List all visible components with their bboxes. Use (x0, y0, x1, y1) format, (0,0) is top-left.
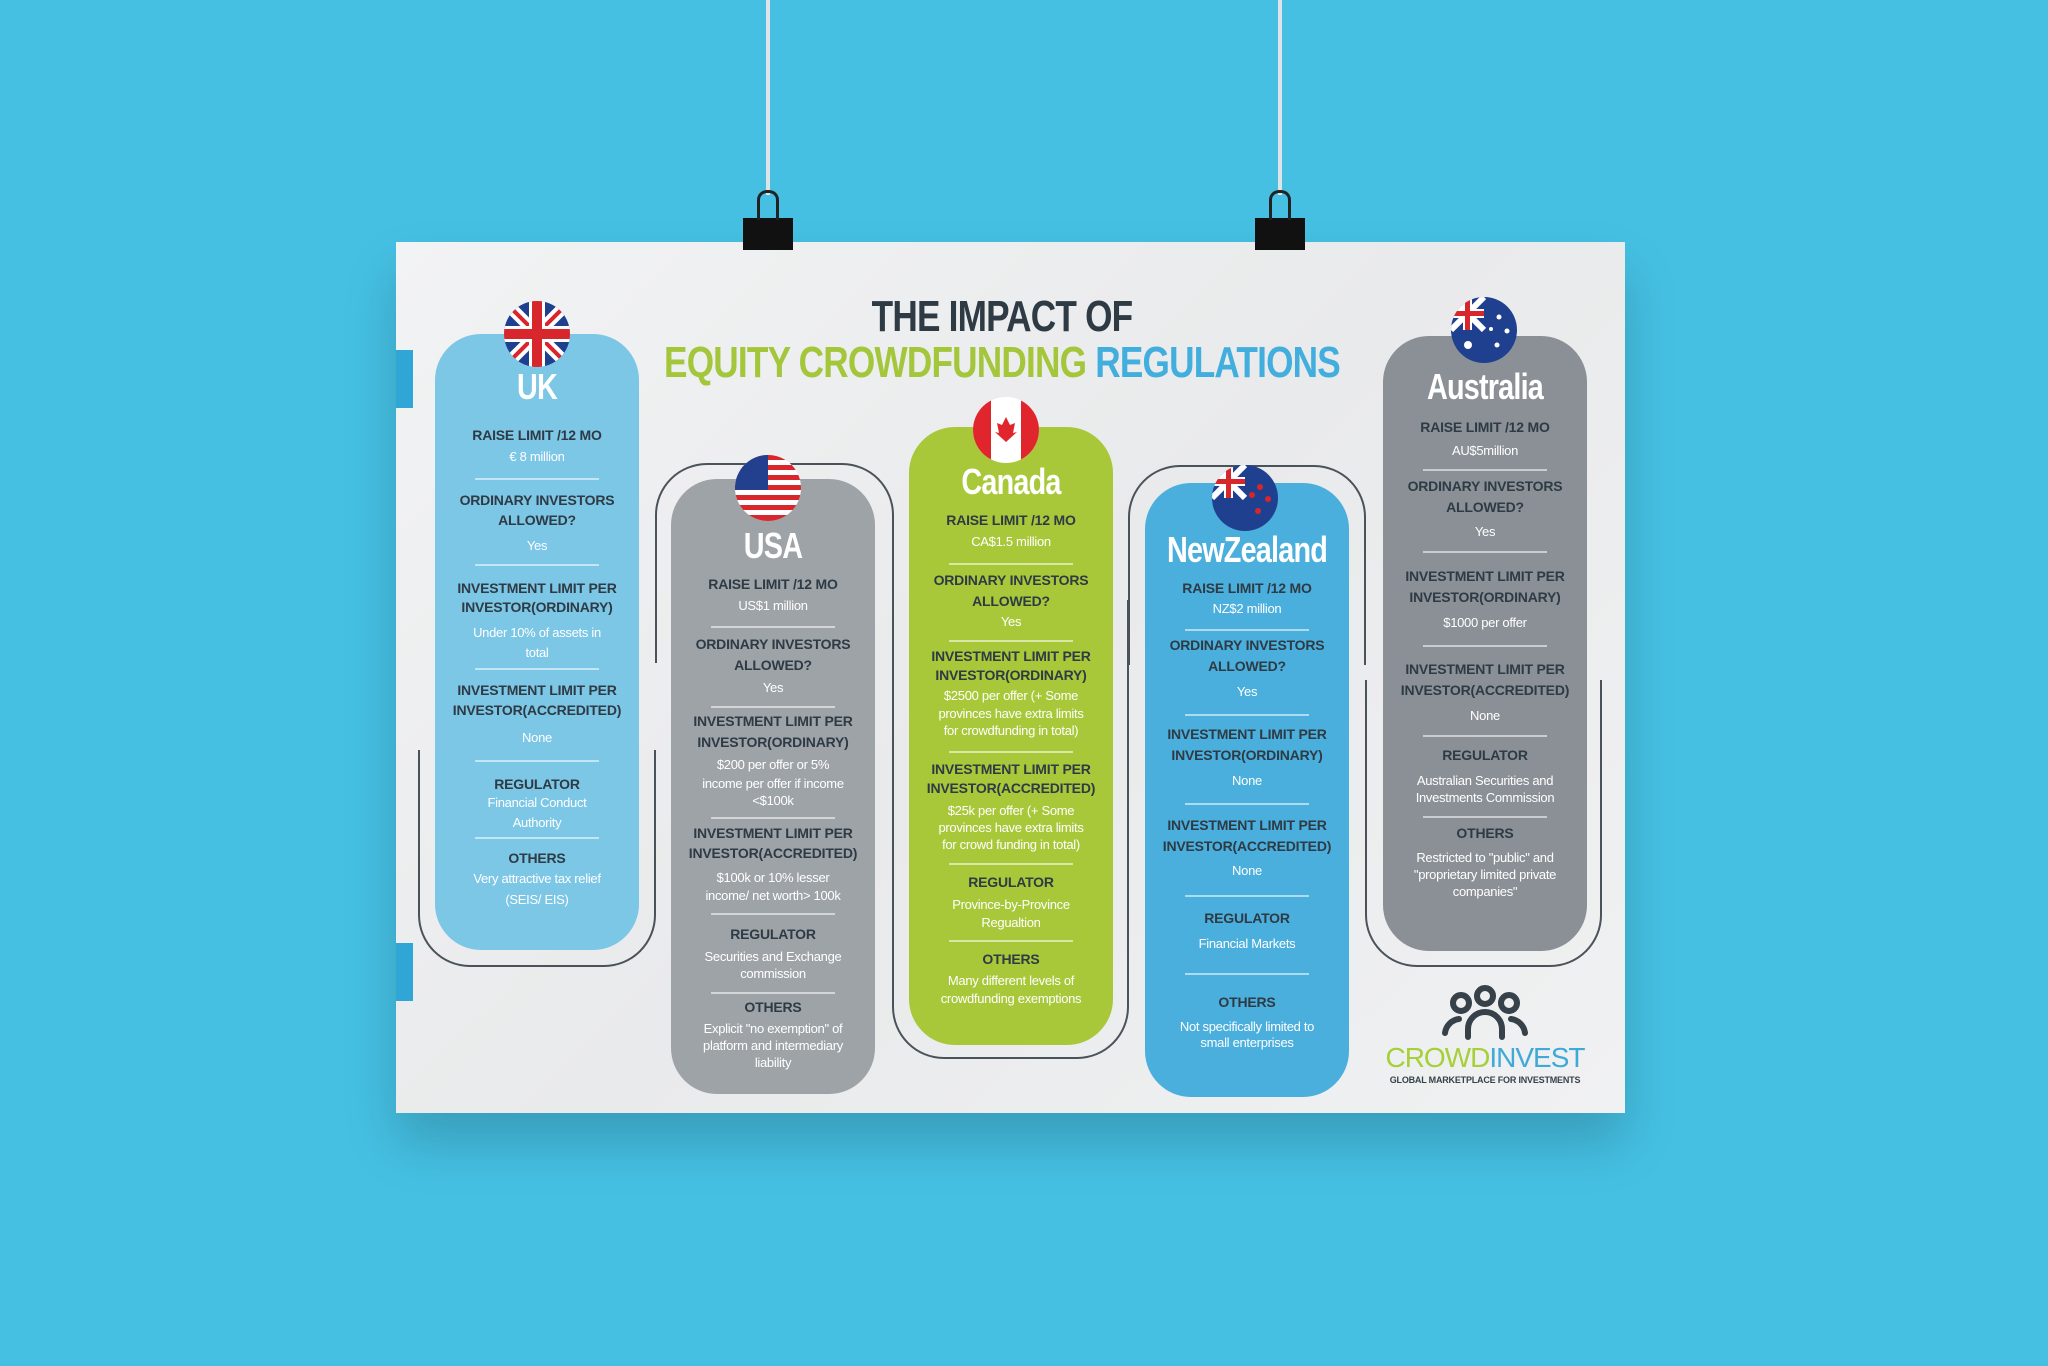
panel: USA: $200 per offer or 5% (717, 757, 829, 772)
panel: Canada: CA$1.5 million (971, 534, 1051, 549)
strings (766, 0, 770, 195)
panel: Canada: INVESTMENT LIMIT PER (931, 761, 1091, 777)
panel: NewZealand: INVESTMENT LIMIT PER (1167, 817, 1327, 833)
title: EQUITY CROWDFUNDING REGULATIONS (664, 338, 1340, 387)
panel: NewZealand: Yes (1237, 684, 1257, 699)
panel: UK: total (525, 645, 549, 660)
panel: Canada: $2500 per offer (+ Some (944, 688, 1078, 703)
panel: UK: INVESTMENT LIMIT PER (457, 580, 617, 596)
panel: USA: Explicit "no exemption" of (704, 1021, 842, 1036)
panel: Australia: AU$5million (1452, 443, 1518, 458)
panel: USA: ALLOWED? (734, 657, 812, 673)
panel: Canada: for crowdfunding in total) (944, 723, 1078, 738)
panel: Australia: OTHERS (1456, 825, 1514, 841)
panel: USA: platform and intermediary (703, 1038, 843, 1053)
panel: UK: ALLOWED? (498, 512, 576, 528)
panel: NewZealand (1145, 483, 1349, 1097)
panel: UK: INVESTMENT LIMIT PER (457, 682, 617, 698)
icon: Canada flag (973, 397, 1039, 463)
panel: NewZealand: None (1232, 773, 1262, 788)
panel: USA: <$100k (752, 793, 794, 808)
panel: Australia: ORDINARY INVESTORS (1408, 478, 1562, 494)
panel: Australia: INVESTMENT LIMIT PER (1405, 568, 1565, 584)
icon: USA flag (735, 455, 801, 521)
panel: Australia: REGULATOR (1442, 747, 1528, 763)
panel: Canada: Many different levels of (948, 973, 1074, 988)
panel: Australia: INVESTOR(ORDINARY) (1409, 589, 1561, 605)
panel: NewZealand: Not specifically limited to (1180, 1019, 1314, 1034)
panel: UK: € 8 million (509, 449, 565, 464)
panel: UK: REGULATOR (494, 776, 580, 792)
panel: USA: liability (755, 1055, 791, 1070)
panel: USA: RAISE LIMIT /12 MO (708, 576, 838, 592)
panel: USA: income/ net worth> 100k (705, 888, 841, 903)
logo: CrowdInvest: GLOBAL MARKETPLACE FOR INVESTMENTS (1390, 1075, 1580, 1085)
panel: Australia: "proprietary limited private (1414, 867, 1556, 882)
panel: Australia: RAISE LIMIT /12 MO (1420, 419, 1550, 435)
panel: Australia: Australian Securities and (1417, 773, 1553, 788)
panel: UK: Very attractive tax relief (473, 871, 601, 886)
panel: USA: $100k or 10% lesser (717, 870, 829, 885)
panel: Australia (1383, 336, 1587, 951)
panel: Canada: for crowd funding in total) (942, 837, 1080, 852)
panel: UK: Financial Conduct (488, 795, 586, 810)
panel: USA: INVESTOR(ACCREDITED) (689, 845, 857, 861)
logo: CrowdInvest (1385, 985, 1585, 1085)
panel: USA: income per offer if income (702, 776, 844, 791)
panel: USA: commission (740, 966, 806, 981)
logo: CrowdInvest: CROWDINVEST (1385, 1042, 1584, 1073)
panel: NewZealand: INVESTOR(ACCREDITED) (1163, 838, 1331, 854)
panel: Canada: ORDINARY INVESTORS (934, 572, 1088, 588)
panel: USA: ORDINARY INVESTORS (696, 636, 850, 652)
panel: Canada: Regualtion (981, 915, 1041, 930)
panel: NewZealand: OTHERS (1218, 994, 1276, 1010)
panel: Canada: INVESTMENT LIMIT PER (931, 648, 1091, 664)
panel: USA: US$1 million (738, 598, 808, 613)
panel: UK: Yes (527, 538, 547, 553)
panel: UK: INVESTOR(ACCREDITED) (453, 702, 621, 718)
panel: UK: (SEIS/ EIS) (505, 892, 569, 907)
panel: NewZealand: INVESTOR(ORDINARY) (1171, 747, 1323, 763)
clip left (743, 218, 793, 250)
panel: Canada: REGULATOR (968, 874, 1054, 890)
title (664, 292, 1340, 387)
panel: NewZealand: INVESTMENT LIMIT PER (1167, 726, 1327, 742)
icon: people (1442, 985, 1528, 1040)
panel: Australia: $1000 per offer (1443, 615, 1527, 630)
panel: Australia: INVESTOR(ACCREDITED) (1401, 682, 1569, 698)
panel: UK: RAISE LIMIT /12 MO (472, 427, 602, 443)
panel: USA: REGULATOR (730, 926, 816, 942)
panel: USA: Yes (763, 680, 783, 695)
panel: USA: INVESTMENT LIMIT PER (693, 713, 853, 729)
panel: Australia: Restricted to "public" and (1416, 850, 1554, 865)
panel: UK (435, 334, 639, 950)
panel: UK: Authority (513, 815, 561, 830)
panel: UK: OTHERS (508, 850, 566, 866)
panel: Australia: None (1470, 708, 1500, 723)
panel: NewZealand: small enterprises (1200, 1035, 1294, 1050)
title: THE IMPACT OF (872, 292, 1132, 341)
icon: UK flag (504, 301, 570, 367)
panel: USA: INVESTOR(ORDINARY) (697, 734, 849, 750)
panel: USA: Securities and Exchange (705, 949, 841, 964)
panel: UK: UK (517, 366, 557, 407)
panel: NewZealand: ORDINARY INVESTORS (1170, 637, 1324, 653)
panel: Canada (909, 427, 1113, 1045)
panel: NewZealand: RAISE LIMIT /12 MO (1182, 580, 1312, 596)
panel: Canada: $25k per offer (+ Some (948, 803, 1074, 818)
panel: USA: OTHERS (744, 999, 802, 1015)
panel: Canada: provinces have extra limits (938, 820, 1084, 835)
panel: Canada: Yes (1001, 614, 1021, 629)
panel: UK: None (522, 730, 552, 745)
panel: UK: Under 10% of assets in (473, 625, 601, 640)
panel: NewZealand: NZ$2 million (1213, 601, 1281, 616)
outlines (418, 750, 656, 967)
panel: Canada: RAISE LIMIT /12 MO (946, 512, 1076, 528)
panel: USA: USA (744, 525, 802, 566)
panel: Canada: Canada (961, 461, 1061, 502)
panel: Australia: Australia (1427, 366, 1543, 407)
clip right (1255, 218, 1305, 250)
panel: Canada: Province-by-Province (952, 897, 1070, 912)
panel: NewZealand: ALLOWED? (1208, 658, 1286, 674)
panel: Canada: crowdfunding exemptions (941, 991, 1081, 1006)
panel: USA: INVESTMENT LIMIT PER (693, 825, 853, 841)
panel: Australia: Yes (1475, 524, 1495, 539)
panel: Canada: provinces have extra limits (938, 706, 1084, 721)
panel: NewZealand: None (1232, 863, 1262, 878)
panel: USA (671, 479, 875, 1094)
panel: NewZealand: Financial Markets (1199, 936, 1295, 951)
panel: UK: ORDINARY INVESTORS (460, 492, 614, 508)
panel: Canada: INVESTOR(ORDINARY) (935, 667, 1087, 683)
panel: Australia: ALLOWED? (1446, 499, 1524, 515)
panel: NewZealand: NewZealand (1167, 529, 1327, 570)
panel: Canada: ALLOWED? (972, 593, 1050, 609)
panel: Australia: INVESTMENT LIMIT PER (1405, 661, 1565, 677)
side tabs (396, 350, 413, 408)
panel: Canada: OTHERS (982, 951, 1040, 967)
poster (396, 242, 1625, 1113)
panel: NewZealand: REGULATOR (1204, 910, 1290, 926)
panel: UK: INVESTOR(ORDINARY) (461, 599, 613, 615)
icon: NZ flag (1212, 465, 1278, 531)
panel: Australia: Investments Commission (1416, 790, 1554, 805)
panel: Australia: companies" (1453, 884, 1517, 899)
panel: Canada: INVESTOR(ACCREDITED) (927, 780, 1095, 796)
icon: Australia flag (1451, 297, 1517, 363)
